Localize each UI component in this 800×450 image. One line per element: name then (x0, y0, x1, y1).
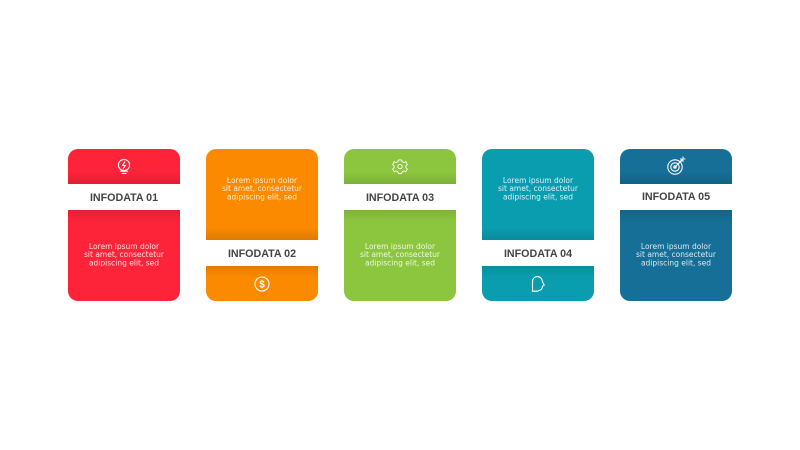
heading: infodata 02: INFODATA 02 (228, 248, 296, 260)
text block: infodata 04: adipiscing elit, sed (503, 192, 573, 201)
heading: infodata 04: INFODATA 04 (504, 248, 572, 260)
icon: dollar coin: $ (259, 280, 265, 290)
text block: infodata 04: Lorem ipsum dolor (503, 176, 574, 185)
text block: infodata 03: Lorem ipsum dolor (365, 242, 436, 251)
icon: target with arrow (668, 157, 685, 174)
icon: dollar coin (255, 277, 269, 291)
text block: infodata 01: Lorem ipsum dolor (89, 242, 160, 251)
heading: infodata 03: INFODATA 03 (366, 192, 434, 204)
text block: infodata 02: sit amet, consectetur (222, 184, 303, 193)
icon: gear (393, 160, 407, 174)
text block: infodata 01: sit amet, consectetur (84, 250, 165, 259)
text block: infodata 01: adipiscing elit, sed (89, 258, 159, 267)
text block: infodata 05: Lorem ipsum dolor (641, 242, 712, 251)
text block: infodata 02: Lorem ipsum dolor (227, 176, 298, 185)
panel: infodata 04 (482, 149, 594, 301)
panel: infodata 02 (206, 149, 318, 301)
icon: head profile (532, 277, 544, 291)
panel: infodata 01 (68, 149, 180, 301)
text block: infodata 05: adipiscing elit, sed (641, 258, 711, 267)
text block: infodata 04: sit amet, consectetur (498, 184, 579, 193)
heading: infodata 05: INFODATA 05 (642, 191, 710, 203)
icon: light bulb with bolt (118, 159, 130, 173)
text block: infodata 03: sit amet, consectetur (360, 250, 441, 259)
panel: infodata 03 (344, 149, 456, 301)
text block: infodata 02: adipiscing elit, sed (227, 192, 297, 201)
text block: infodata 05: sit amet, consectetur (636, 250, 717, 259)
text block: infodata 03: adipiscing elit, sed (365, 258, 435, 267)
panel: infodata 05 (620, 149, 732, 301)
heading: infodata 01: INFODATA 01 (90, 192, 158, 204)
